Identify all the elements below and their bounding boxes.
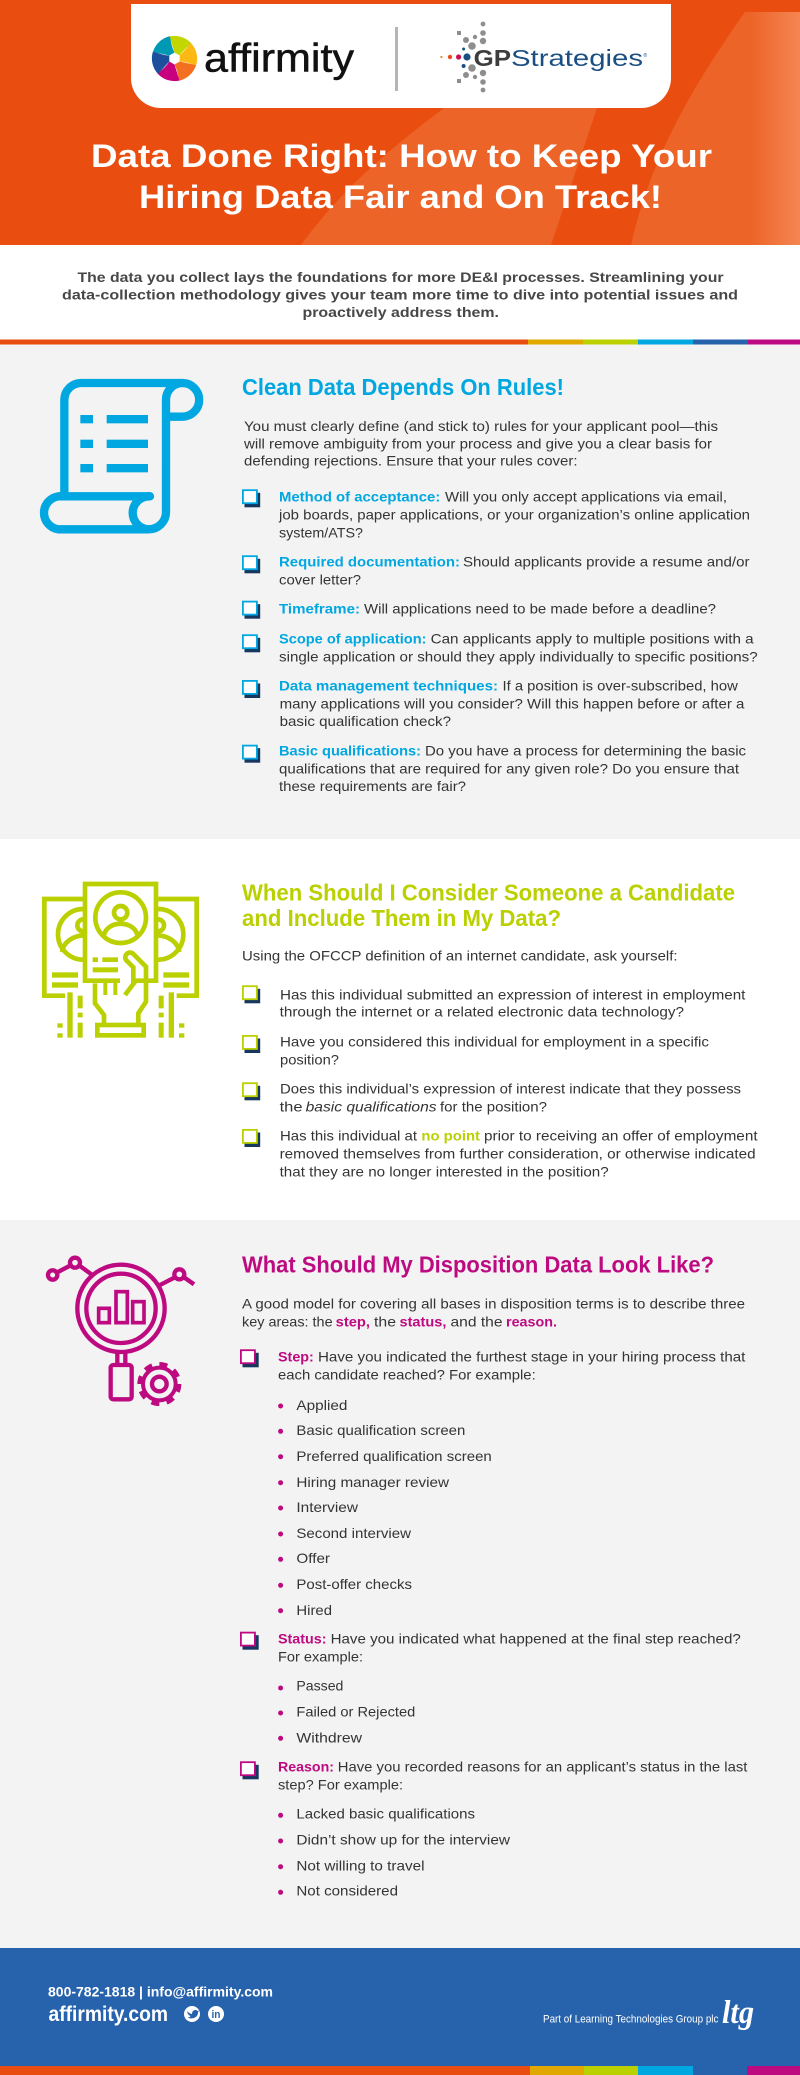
logo: GP Strategies: [440, 22, 648, 92]
item: status: For example:: [278, 1650, 363, 1665]
intro text: proactively address them.: [302, 304, 499, 320]
item: no point removed: removed themselves from further consideration, or otherwise indicated: [280, 1147, 756, 1162]
text block: disposition intro: key areas: the: [242, 1315, 333, 1330]
item: scope of application: Can applicants apply to multiple positions with a: [431, 632, 754, 647]
list: reason examples: Lacked basic qualifications: [296, 1807, 475, 1822]
icon: magnifier with chart and gear: [48, 1258, 194, 1404]
item: basic qualifications: these requirements are fair?: [279, 779, 466, 794]
item: required documentation: Should applicants provide a resume and/or: [463, 555, 750, 570]
text block: clean data intro: You must clearly define (and stick to) rules for your applicant pool—this: [244, 419, 718, 434]
item: step: each candidate reached? For example:: [278, 1368, 536, 1383]
item: basic qualifications check: Does this individual’s expression of interest indicate that they possess: [280, 1082, 741, 1097]
item: method of acceptance: job boards, paper applications, or your organization’s online application: [278, 508, 750, 523]
logo card: [131, 4, 671, 108]
footer: [0, 1948, 800, 2075]
item: data management techniques: basic qualification check?: [280, 714, 451, 729]
item: method of acceptance: [243, 490, 750, 541]
item: data management techniques: If a position is over-subscribed, how: [502, 679, 738, 694]
list: step examples: Preferred qualification screen: [296, 1449, 492, 1464]
title: Hiring Data Fair and On Track!: [139, 179, 662, 215]
panel: candidate definition: [0, 839, 800, 1220]
item: basic qualifications: Do you have a process for determining the basic: [425, 744, 746, 759]
text block: disposition intro: the: [374, 1315, 396, 1330]
text block: clean data intro: [243, 419, 718, 469]
item: considered for position: Have you considered this individual for employment in a specific: [280, 1035, 709, 1050]
list: reason examples: Didn’t show up for the interview: [296, 1833, 510, 1848]
text block: disposition intro: reason.: [506, 1315, 557, 1330]
item: no point removed: Has this individual at: [280, 1129, 417, 1144]
item: status: [241, 1632, 741, 1665]
item: basic qualifications check: basic qualifications: [306, 1100, 437, 1115]
item: expression of interest: Has this individual submitted an expression of interest in employment: [280, 988, 746, 1003]
item: reason: Have you recorded reasons for an applicant’s status in the last: [338, 1760, 748, 1775]
list: reason examples: Not considered: [296, 1884, 398, 1899]
item: expression of interest: [243, 986, 746, 1020]
item: basic qualifications check: the: [280, 1100, 303, 1115]
item: step: Step:: [278, 1350, 314, 1365]
item: method of acceptance: system/ATS?: [279, 526, 363, 541]
item: step: [241, 1350, 746, 1383]
text block: candidate intro: Using the OFCCP definition of an internet candidate, ask yourself:: [242, 949, 678, 964]
item: no point removed: [243, 1129, 758, 1180]
text block: disposition intro: A good model for covering all bases in disposition terms is to describe three: [242, 1297, 745, 1312]
item: method of acceptance: Method of acceptance:: [279, 490, 440, 505]
item: basic qualifications check: [243, 1082, 741, 1115]
list: status examples: [278, 1679, 415, 1746]
item: required documentation: Required documentation:: [279, 555, 460, 570]
logo: affirmity: [146, 32, 354, 85]
item: timeframe: [243, 602, 716, 619]
item: scope of application: single application or should they apply individually to specific positions?: [279, 650, 758, 665]
item: scope of application: Scope of application:: [279, 632, 426, 647]
text block: disposition intro: [242, 1297, 745, 1330]
item: required documentation: cover letter?: [279, 573, 361, 588]
item: basic qualifications: qualifications that are required for any given role? Do you ensure that: [279, 762, 739, 777]
intro text: [0, 245, 800, 340]
icon: linkedin: [208, 2006, 224, 2022]
list: step examples: Offer: [296, 1551, 331, 1566]
title: Data Done Right: How to Keep Your: [91, 138, 712, 174]
logo: GP Strategies: ®: [644, 52, 648, 59]
heading: clean data: Clean Data Depends On Rules!: [242, 374, 564, 400]
LTG tagline: Part of Learning Technologies Group plc: [543, 2014, 719, 2026]
intro text: data-collection methodology gives your team more time to dive into potential issues and: [62, 286, 738, 302]
item: no point removed: no point: [421, 1129, 481, 1144]
item: reason: Reason:: [278, 1760, 334, 1775]
item: no point removed: prior to receiving an offer of employment: [484, 1129, 758, 1144]
heading: candidate: and Include Them in My Data?: [242, 905, 561, 931]
item: status: Have you indicated what happened at the final step reached?: [331, 1632, 741, 1647]
header banner: [0, 0, 800, 245]
list: reason examples: Not willing to travel: [296, 1859, 424, 1874]
item: considered for position: [243, 1035, 709, 1068]
logo: GP Strategies: GP: [474, 45, 511, 71]
list: status examples: Failed or Rejected: [296, 1705, 415, 1720]
logo: affirmity: affirmity: [204, 37, 354, 81]
icon: candidate profiles and hand: [44, 884, 197, 1038]
text block: clean data intro: will remove ambiguity from your process and give you a clear basis for: [243, 436, 713, 451]
contact details: 800-782-1818 | info@affirmity.com: [48, 1984, 273, 2000]
item: data management techniques: [243, 679, 745, 729]
text block: disposition intro: and the: [450, 1315, 502, 1330]
list: status examples: Withdrew: [296, 1731, 362, 1746]
list: step examples: Hiring manager review: [296, 1475, 449, 1490]
list: step examples: Hired: [296, 1603, 332, 1618]
item: data management techniques: Data management techniques:: [279, 679, 498, 694]
item: status: Status:: [278, 1632, 326, 1647]
item: method of acceptance: Will you only accept applications via email,: [445, 490, 727, 505]
list: step examples: Post-offer checks: [296, 1577, 412, 1592]
item: considered for position: position?: [280, 1053, 339, 1068]
list: reason examples: [278, 1807, 510, 1899]
item: required documentation: [243, 555, 750, 588]
list: step examples: Basic qualification screen: [296, 1423, 465, 1438]
list: step examples: Second interview: [296, 1526, 411, 1541]
icon: twitter: [184, 2006, 200, 2022]
icon: scroll document: [44, 383, 199, 529]
intro text: The data you collect lays the foundations for more DE&I processes. Streamlining your: [78, 269, 724, 285]
item: basic qualifications: Basic qualifications:: [279, 744, 421, 759]
text block: clean data intro: defending rejections. Ensure that your rules cover:: [244, 454, 578, 469]
item: no point removed: that they are no longer interested in the position?: [280, 1165, 609, 1180]
website: affirmity.com: [48, 2003, 168, 2026]
heading: candidate: When Should I Consider Someone a Candidate: [242, 880, 735, 906]
list: status examples: Passed: [296, 1679, 343, 1694]
item: scope of application: [243, 632, 758, 665]
heading: disposition: What Should My Disposition Data Look Like?: [242, 1251, 714, 1277]
item: reason: [241, 1760, 748, 1793]
item: basic qualifications: [243, 744, 746, 794]
title: [91, 138, 712, 215]
item: basic qualifications check: for the position?: [440, 1100, 547, 1115]
LTG tagline: ltg: [722, 1995, 754, 2031]
heading: candidate: [242, 880, 735, 931]
logo: GP Strategies: Strategies: [511, 45, 643, 71]
LTG tagline: [543, 1995, 754, 2031]
panel: disposition data: [0, 1220, 800, 1948]
panel: clean data rules: [0, 344, 800, 839]
item: data management techniques: many applications will you consider? Will this happen before or after a: [280, 697, 745, 712]
item: reason: step? For example:: [278, 1778, 403, 1793]
item: expression of interest: through the internet or a related electronic data technology?: [280, 1005, 684, 1020]
list: step examples: Interview: [296, 1500, 358, 1515]
item: timeframe: Timeframe:: [279, 602, 360, 617]
list: step examples: Applied: [296, 1398, 347, 1413]
item: step: Have you indicated the furthest stage in your hiring process that: [318, 1350, 746, 1365]
icon: linkedin: in: [212, 2009, 221, 2021]
item: timeframe: Will applications need to be made before a deadline?: [364, 602, 716, 617]
text block: disposition intro: status,: [400, 1315, 446, 1330]
list: step examples: [278, 1398, 492, 1618]
text block: disposition intro: step,: [336, 1315, 370, 1330]
